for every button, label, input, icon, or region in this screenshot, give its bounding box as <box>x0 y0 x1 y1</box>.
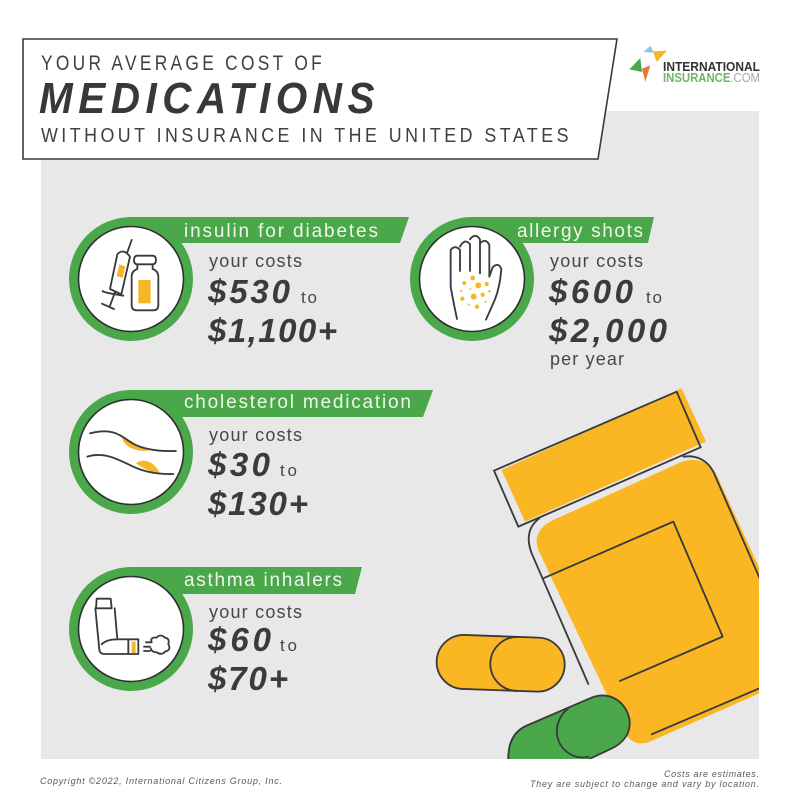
high price: $2,000 <box>548 312 668 349</box>
green pill <box>508 696 630 763</box>
title block <box>23 39 617 159</box>
disclaimer <box>530 769 759 789</box>
icon: inhaler <box>95 599 169 654</box>
low price: $60 <box>207 621 272 658</box>
low price: $30 <box>207 446 271 483</box>
bottle body <box>529 456 763 743</box>
disclaimer line 1: Costs are estimates. <box>664 769 759 779</box>
icon: syringe and vial <box>102 240 158 310</box>
green ring <box>69 390 193 514</box>
copyright: Copyright ©2022, International Citizens Group, Inc. <box>40 776 282 786</box>
green ring <box>69 217 193 341</box>
logo mark <box>629 46 667 82</box>
label: asthma inhalers <box>184 570 342 591</box>
logo text line 2: INSURANCE.COM <box>663 71 760 85</box>
banner <box>131 217 409 243</box>
disclaimer line 2: They are subject to change and vary by location. <box>530 779 759 789</box>
your costs: your costs <box>209 602 302 622</box>
icon: artery with plaque <box>87 431 176 474</box>
panel: insulin for diabetes <box>69 217 409 349</box>
to: to <box>301 288 317 307</box>
banner <box>131 567 362 594</box>
white circle <box>420 226 524 332</box>
icon: hand with rash <box>451 236 501 320</box>
title main word: MEDICATIONS <box>39 74 380 123</box>
white circle <box>78 400 184 504</box>
label: insulin for diabetes <box>184 221 378 242</box>
illustration: pill bottle and pills <box>437 388 763 763</box>
low price: $530 <box>207 273 291 310</box>
white circle <box>78 576 184 682</box>
white circle <box>78 226 184 332</box>
green ring <box>410 217 534 341</box>
bottle cap <box>494 388 706 527</box>
your costs: your costs <box>550 251 643 271</box>
to: to <box>280 636 297 655</box>
low price: $600 <box>548 273 634 310</box>
green ring <box>69 567 193 691</box>
high price: $130+ <box>207 485 308 522</box>
title frame <box>23 39 617 159</box>
title line 1: YOUR AVERAGE COST OF <box>41 52 325 75</box>
yellow pill <box>437 635 565 692</box>
label: cholesterol medication <box>184 392 411 413</box>
logo text line 1: INTERNATIONAL <box>663 60 760 74</box>
title line 3: WITHOUT INSURANCE IN THE UNITED STATES <box>41 124 572 147</box>
panel: asthma inhalers <box>69 567 362 697</box>
your costs: your costs <box>209 425 302 445</box>
logo <box>629 46 760 85</box>
banner <box>472 217 654 243</box>
banner <box>131 390 433 417</box>
panel: cholesterol medication <box>69 390 433 522</box>
high price: $70+ <box>207 660 288 697</box>
background panel <box>41 111 759 759</box>
to: to <box>646 288 662 307</box>
panel: allergy shots <box>410 217 668 369</box>
per year: per year <box>550 349 624 369</box>
label: allergy shots <box>517 221 643 242</box>
your costs: your costs <box>209 251 302 271</box>
high price: $1,100+ <box>207 312 337 349</box>
to: to <box>280 461 297 480</box>
